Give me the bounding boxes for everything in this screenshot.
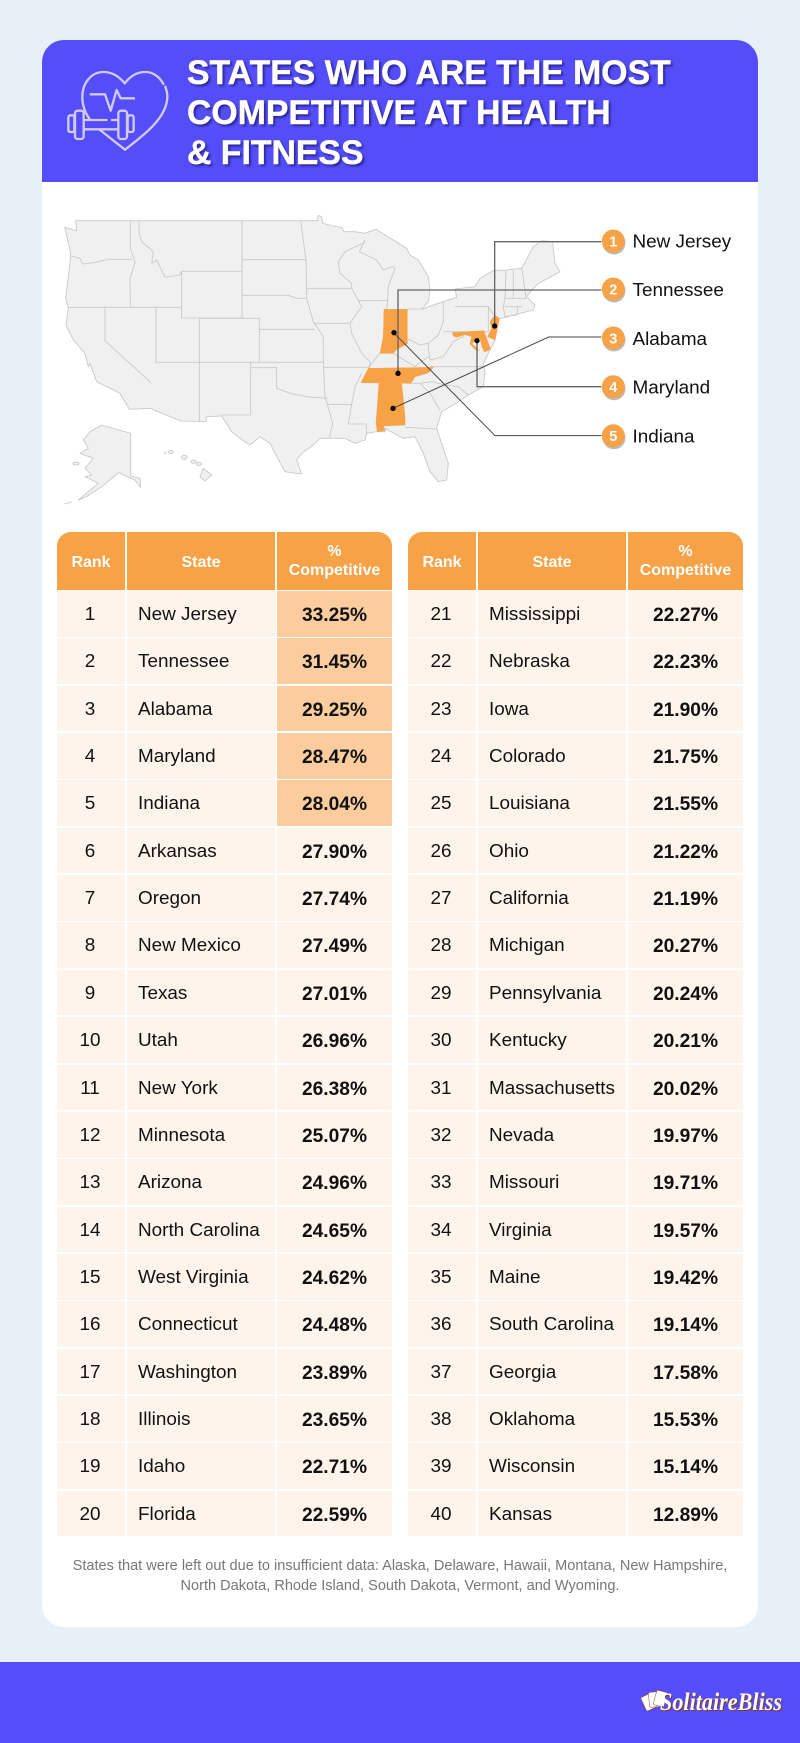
row 16	[57, 1301, 392, 1347]
row 3	[57, 686, 392, 731]
footnote: States that were left out due to insufficient data: Alaska, Delaware, Hawaii, Montana, New Hampshire,	[73, 1558, 727, 1574]
row 27: California	[489, 888, 569, 909]
row 17: 17	[79, 1362, 100, 1383]
row 35: 35	[430, 1267, 452, 1288]
row 23: Iowa	[489, 699, 529, 720]
row 17: Washington	[138, 1362, 237, 1383]
row 10: Utah	[138, 1030, 178, 1051]
row 18: 18	[79, 1409, 100, 1430]
row 7: 7	[85, 888, 95, 909]
row 22: 22	[430, 651, 452, 672]
row 11: 26.38%	[302, 1078, 367, 1100]
callout 4: Maryland: 4	[609, 380, 617, 396]
row 28: 28	[430, 935, 452, 956]
row 34: Virginia	[489, 1220, 552, 1241]
row 1: New Jersey	[138, 604, 237, 625]
row 37: 37	[430, 1362, 452, 1383]
row 2: 2	[85, 651, 95, 672]
row 31: 31	[430, 1078, 452, 1098]
row 13: 13	[79, 1172, 100, 1193]
row 30: Kentucky	[489, 1030, 567, 1051]
icon: playing cards	[641, 1690, 668, 1711]
row 14: North Carolina	[138, 1220, 260, 1241]
callout 3: Alabama: 3	[609, 331, 617, 347]
row 12: 12	[79, 1125, 100, 1146]
row 24: 24	[430, 746, 452, 767]
title	[187, 54, 674, 172]
row 25	[408, 780, 743, 826]
title: & FITNESS	[187, 134, 364, 172]
row 18: 23.65%	[302, 1410, 367, 1431]
row 33	[408, 1159, 743, 1205]
row 11	[57, 1065, 392, 1110]
map: contiguous states	[65, 215, 560, 482]
row 36: 36	[430, 1314, 452, 1335]
row 33: 19.71%	[653, 1173, 718, 1194]
table header: Rank	[71, 554, 111, 571]
row 33: 33	[430, 1172, 452, 1193]
row 19	[57, 1443, 392, 1489]
row 2	[57, 638, 392, 684]
row 32: Nevada	[489, 1125, 554, 1146]
callout list	[602, 230, 732, 449]
title: COMPETITIVE AT HEALTH	[187, 94, 611, 132]
row 31: 20.02%	[653, 1078, 718, 1100]
row 26: 21.22%	[653, 842, 718, 863]
callout 2: Tennessee: Tennessee	[632, 280, 724, 301]
row 5: Indiana	[138, 793, 200, 814]
row 24: 21.75%	[653, 747, 718, 768]
row 28: 20.27%	[653, 936, 718, 957]
logo: Solitaire Bliss	[630, 1680, 800, 1730]
row 4: Maryland	[138, 746, 216, 767]
row 11: New York	[138, 1078, 218, 1098]
row 32	[408, 1112, 743, 1158]
callout 2: Tennessee	[602, 278, 724, 302]
row 32: 19.97%	[653, 1126, 718, 1147]
row 6: 6	[85, 841, 95, 862]
table header: Competitive	[289, 562, 380, 579]
row 28: Michigan	[489, 935, 565, 956]
map: Hawaii	[64, 450, 212, 504]
row 5: 5	[85, 793, 95, 814]
row 29: 20.24%	[653, 984, 718, 1005]
table header: State	[532, 554, 572, 571]
logo: Solitaire Bliss: SolitaireBliss	[660, 1689, 782, 1716]
row 32: 32	[430, 1125, 452, 1146]
row 11: 11	[80, 1078, 100, 1098]
row 38	[408, 1396, 743, 1442]
row 15	[57, 1254, 392, 1300]
row 40: Kansas	[489, 1504, 552, 1525]
callout 2: Tennessee: 2	[609, 282, 617, 298]
row 6: Arkansas	[138, 841, 217, 862]
row 30: 30	[430, 1030, 452, 1051]
row 21	[408, 591, 743, 637]
row 29: 29	[430, 983, 452, 1004]
row 14: 14	[79, 1220, 100, 1241]
table header: %	[327, 542, 342, 560]
header banner	[42, 40, 758, 182]
row 39: Wisconsin	[489, 1456, 575, 1477]
row 40: 12.89%	[653, 1505, 718, 1526]
table header: Rank	[422, 554, 462, 571]
footer bar	[0, 1662, 800, 1743]
row 1: 1	[85, 604, 95, 625]
row 7	[57, 875, 392, 921]
table header: State	[181, 554, 221, 571]
row 27	[408, 875, 743, 921]
row 26: Ohio	[489, 841, 529, 862]
callout 3: Alabama: Alabama	[632, 329, 708, 350]
row 2: Tennessee	[138, 651, 229, 672]
row 36: South Carolina	[489, 1314, 614, 1335]
row 36	[408, 1301, 743, 1347]
table: ranks 1 to 20	[57, 532, 392, 1536]
row 35: 19.42%	[653, 1268, 718, 1289]
row 24	[408, 733, 743, 779]
row 3: 29.25%	[302, 700, 367, 721]
table header	[408, 532, 743, 590]
row 38: 38	[430, 1409, 452, 1430]
row 21: 21	[430, 604, 452, 625]
callout 5: Indiana: Indiana	[632, 426, 695, 448]
row 36: 19.14%	[653, 1315, 718, 1336]
callout 1: New Jersey: 1	[609, 234, 617, 250]
row 15: 15	[79, 1267, 100, 1288]
row 31	[408, 1065, 743, 1110]
row 22: 22.23%	[653, 652, 718, 673]
row 15: 24.62%	[302, 1268, 367, 1289]
row 17	[57, 1349, 392, 1394]
row 21: Mississippi	[489, 604, 580, 625]
row 39: 15.14%	[653, 1457, 718, 1478]
row 12: 25.07%	[302, 1126, 367, 1147]
row 37	[408, 1349, 743, 1394]
row 8: 27.49%	[302, 936, 367, 957]
row 3: 3	[85, 699, 95, 720]
table header: Competitive	[640, 562, 731, 579]
leader dots	[390, 323, 497, 411]
map: highlighted states	[361, 309, 499, 432]
row 9	[57, 970, 392, 1015]
row 23: 23	[430, 699, 452, 720]
map: Alaska	[78, 425, 141, 500]
row 22: Nebraska	[489, 651, 570, 672]
row 4: 28.47%	[302, 747, 367, 768]
icon: heart with pulse and dumbbell	[67, 70, 168, 151]
row 8: 8	[85, 935, 95, 956]
row 23	[408, 686, 743, 731]
leader lines	[398, 242, 601, 387]
row 6	[57, 828, 392, 873]
row 40: 40	[430, 1504, 452, 1525]
row 21: 22.27%	[653, 605, 718, 626]
row 7: Oregon	[138, 888, 201, 909]
row 14: 24.65%	[302, 1221, 367, 1242]
map of the United States with top five callouts	[64, 214, 732, 504]
row 27: 27	[430, 888, 452, 909]
row 1	[57, 591, 392, 637]
row 8: New Mexico	[138, 935, 241, 956]
row 26: 26	[430, 841, 452, 862]
row 9: Texas	[138, 983, 187, 1004]
map: state borders	[68, 221, 526, 438]
row 25: 25	[430, 793, 452, 814]
table header: %	[678, 542, 693, 560]
logo: Solitaire Bliss: SolitaireBliss	[661, 1690, 783, 1717]
row 23: 21.90%	[653, 700, 718, 721]
row 20	[57, 1491, 392, 1536]
row 38: 15.53%	[653, 1410, 718, 1431]
row 20: Florida	[138, 1504, 196, 1525]
row 25: 21.55%	[653, 794, 718, 815]
row 9: 27.01%	[302, 984, 367, 1005]
row 29: Pennsylvania	[489, 983, 601, 1004]
row 19: Idaho	[138, 1456, 185, 1477]
title: STATES WHO ARE THE MOST	[187, 54, 671, 92]
row 31: Massachusetts	[489, 1078, 615, 1098]
row 20: 20	[79, 1504, 100, 1525]
row 24: Colorado	[489, 746, 566, 767]
row 39: 39	[430, 1456, 452, 1477]
row 33: Missouri	[489, 1172, 559, 1193]
row 26	[408, 828, 743, 873]
row 16: 24.48%	[302, 1315, 367, 1336]
row 16: Connecticut	[138, 1314, 238, 1335]
state: New Jersey	[488, 315, 499, 340]
row 34: 34	[430, 1220, 452, 1241]
row 12: Minnesota	[138, 1125, 225, 1146]
row 19: 19	[79, 1456, 100, 1477]
row 30: 20.21%	[653, 1031, 718, 1052]
row 37: 17.58%	[653, 1363, 718, 1384]
row 7: 27.74%	[302, 889, 367, 910]
row 5	[57, 780, 392, 826]
row 16: 16	[79, 1314, 100, 1335]
row 18: Illinois	[138, 1409, 190, 1430]
state: Indiana	[380, 309, 407, 353]
row 29	[408, 970, 743, 1015]
row 30	[408, 1017, 743, 1063]
row 25: Louisiana	[489, 793, 570, 814]
row 28	[408, 922, 743, 968]
row 10: 10	[79, 1030, 100, 1051]
row 17: 23.89%	[302, 1363, 367, 1384]
row 40	[408, 1491, 743, 1536]
footnote	[42, 1557, 758, 1596]
callout 1: New Jersey	[602, 230, 732, 254]
row 4	[57, 733, 392, 779]
row 13: Arizona	[138, 1172, 202, 1193]
row 10: 26.96%	[302, 1031, 367, 1052]
row 39	[408, 1443, 743, 1489]
table header	[57, 532, 392, 590]
row 27: 21.19%	[653, 889, 718, 910]
callout 3: Alabama	[602, 326, 708, 352]
row 18	[57, 1396, 392, 1442]
row 8	[57, 922, 392, 968]
callout 5: Indiana: 5	[609, 429, 617, 445]
row 12	[57, 1112, 392, 1158]
row 15: West Virginia	[138, 1267, 249, 1288]
callout 5: Indiana	[602, 424, 695, 449]
row 37: Georgia	[489, 1362, 556, 1383]
row 14	[57, 1207, 392, 1252]
row 9: 9	[85, 983, 95, 1004]
state: Maryland	[452, 331, 491, 352]
state: Alabama	[376, 383, 405, 432]
row 35	[408, 1254, 743, 1300]
callout 4: Maryland	[602, 375, 710, 400]
row 5: 28.04%	[302, 794, 367, 815]
row 10	[57, 1017, 392, 1063]
row 20: 22.59%	[302, 1505, 367, 1526]
footnote: North Dakota, Rhode Island, South Dakota, Vermont, and Wyoming.	[181, 1578, 619, 1594]
row 13	[57, 1159, 392, 1205]
table: ranks 21 to 40	[408, 532, 743, 1536]
state: Tennessee	[361, 367, 433, 383]
row 6: 27.90%	[302, 842, 367, 863]
row 34	[408, 1207, 743, 1252]
row 19: 22.71%	[302, 1457, 367, 1478]
row 35: Maine	[489, 1267, 540, 1288]
row 1: 33.25%	[302, 605, 367, 626]
callout 4: Maryland: Maryland	[632, 378, 710, 398]
row 22	[408, 638, 743, 684]
row 13: 24.96%	[302, 1173, 367, 1194]
row 34: 19.57%	[653, 1221, 718, 1242]
row 2: 31.45%	[302, 652, 367, 673]
row 3: Alabama	[138, 699, 213, 720]
callout 1: New Jersey: New Jersey	[632, 232, 732, 252]
row 38: Oklahoma	[489, 1409, 575, 1430]
row 4: 4	[85, 746, 95, 767]
